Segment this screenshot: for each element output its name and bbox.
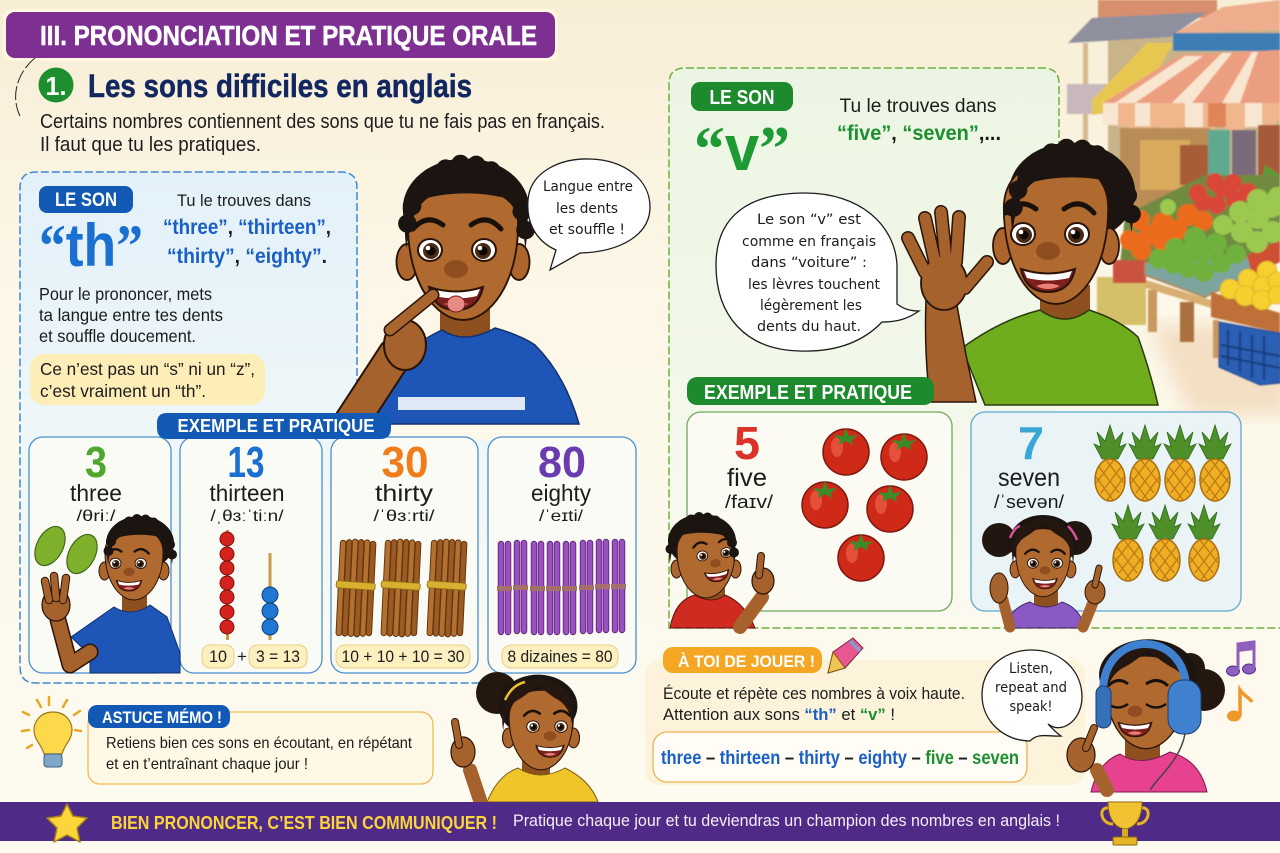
bottom banner	[0, 802, 1280, 841]
badge: le son	[691, 82, 793, 111]
introduction text: Certains nombres contiennent des sons que tu ne fais pas en français.	[40, 111, 605, 133]
panel: astuce memo	[88, 705, 433, 784]
card: seven: 7	[1018, 417, 1044, 469]
speech bubble: th	[528, 159, 650, 270]
panel: astuce memo: Retiens bien ces sons en écoutant, en répétant	[106, 735, 413, 752]
card: three: /θriː/	[76, 508, 116, 525]
speech bubble: listen: Listen,	[1009, 661, 1053, 677]
speech bubble: th: Langue entre	[543, 179, 633, 195]
card: seven: /ˈsevən/	[994, 492, 1064, 512]
card: seven: seven	[998, 464, 1060, 492]
card: thirteen: /ˌθɜːˈtiːn/	[210, 508, 284, 525]
badge: exemple et pratique blue	[157, 413, 391, 439]
card: five	[687, 412, 952, 611]
words containing th: “thirty”, “eighty”.	[167, 245, 327, 268]
boy showing three fingers	[42, 514, 180, 673]
panel: a toi de jouer: Attention aux sons “th” et “v” !	[663, 705, 895, 724]
yellow note: c’est vraiment un “th”.	[40, 381, 206, 401]
words containing v	[837, 96, 1001, 145]
card: three: 3	[85, 438, 107, 487]
sound label th: “th”	[39, 212, 143, 279]
panel: a toi de jouer: three – thirteen – thirty – eighty – five – seven	[661, 748, 1019, 769]
speech bubble: v: dans “voiture” :	[751, 255, 867, 271]
girl pointing up	[451, 672, 598, 802]
bottom banner: Pratique chaque jour et tu deviendras un champion des nombres en anglais !	[513, 811, 1060, 830]
five tomatoes	[802, 428, 927, 581]
introduction text	[40, 111, 605, 156]
yellow note	[30, 354, 265, 405]
words containing th	[163, 191, 331, 268]
panel: a toi de jouer: Écoute et répète ces nombres à voix haute.	[663, 684, 965, 703]
speech bubble: v: les lèvres touchent	[748, 277, 880, 293]
icon: orange music note	[1227, 690, 1252, 722]
section heading: Les sons difficiles en anglais	[88, 68, 472, 104]
bottom banner: BIEN PRONONCER, C’EST BIEN COMMUNIQUER !	[111, 813, 497, 833]
boy thumbs up	[666, 512, 774, 628]
card: thirty: thirty	[375, 480, 434, 506]
card: three: three	[70, 480, 122, 506]
speech bubble: listen: speak!	[1010, 699, 1052, 715]
badge: le son: LE SON	[710, 87, 774, 109]
badge: le son	[39, 186, 133, 213]
equation	[202, 645, 307, 668]
card: thirty: 30	[382, 438, 428, 487]
speech bubble: listen	[982, 650, 1082, 741]
card: five: 5	[734, 417, 760, 469]
speech bubble: th: les dents	[556, 201, 618, 217]
words containing th: Tu le trouves dans	[177, 191, 311, 210]
how to pronounce: ta langue entre tes dents	[39, 305, 223, 325]
cards row for th	[29, 437, 636, 673]
icon: trophy	[1102, 802, 1148, 845]
badge: exemple et pratique blue: EXEMPLE ET PRATIQUE	[178, 416, 374, 436]
words containing v: “five”, “seven”,...	[837, 122, 1001, 145]
icon: star	[47, 804, 87, 842]
title banner	[3, 9, 558, 61]
words containing th: “three”, “thirteen”,	[163, 216, 331, 239]
section heading: 1.	[46, 71, 66, 101]
icon: purple music note	[1226, 642, 1256, 676]
card: thirteen: thirteen	[210, 480, 284, 506]
boy explaining th	[350, 155, 579, 424]
yellow note: Ce n’est pas un “s” ni un “z”,	[40, 359, 255, 379]
bundles of sticks	[333, 541, 469, 635]
panel: a toi de jouer: À TOI DE JOUER !	[678, 652, 815, 671]
equation: +	[237, 647, 247, 666]
badge: exemple et pratique green: EXEMPLE ET PRATIQUE	[704, 382, 912, 404]
badge: le son: LE SON	[55, 190, 117, 211]
how to pronounce: et souffle doucement.	[39, 326, 196, 346]
words containing v: Tu le trouves dans	[840, 96, 996, 117]
card: thirty	[331, 437, 478, 673]
card: eighty: eighty	[531, 480, 591, 506]
speech bubble: v: Le son “v” est	[757, 212, 862, 228]
how to pronounce	[39, 284, 223, 346]
sound label v: “v”	[694, 112, 790, 184]
icon: two mangoes	[29, 521, 103, 579]
card: thirty: /ˈθɜːrti/	[374, 508, 435, 525]
card: seven	[971, 412, 1241, 611]
card: eighty	[488, 437, 636, 673]
panel: v sound	[669, 68, 1280, 628]
panel: astuce memo: et en t’entraînant chaque jour !	[106, 756, 308, 773]
boy waving	[908, 139, 1158, 405]
how to pronounce: Pour le prononcer, mets	[39, 284, 212, 304]
panel: th sound	[20, 172, 637, 683]
icon: pencil	[828, 638, 863, 673]
card: eighty: /ˈeɪti/	[539, 508, 584, 525]
card: three	[29, 437, 171, 673]
seven pineapples	[1094, 425, 1231, 581]
market background illustration	[1067, 0, 1280, 415]
card: five: /faɪv/	[725, 492, 773, 512]
speech bubble: v: comme en français	[742, 234, 876, 250]
equation: 10 + 10 + 10 = 30	[342, 647, 464, 666]
speech bubble: v: légèrement les	[760, 298, 862, 314]
girl with buns	[982, 515, 1105, 628]
equation: 8 dizaines = 80	[508, 647, 612, 666]
speech bubble: v	[716, 193, 919, 351]
equation: 3 = 13	[256, 647, 300, 666]
card: thirteen: 13	[228, 438, 264, 487]
introduction text: Il faut que tu les pratiques.	[40, 134, 261, 156]
girl with headphones	[1067, 639, 1225, 792]
speech bubble: th: et souffle !	[549, 222, 625, 238]
speech bubble: v: dents du haut.	[757, 319, 861, 335]
equation: 10	[209, 647, 227, 666]
curved dashed decoration	[16, 58, 35, 116]
purple sticks	[497, 542, 626, 632]
card: thirteen	[180, 437, 322, 673]
card: five: five	[727, 464, 767, 492]
card: eighty: 80	[538, 438, 586, 487]
speech bubble: listen: repeat and	[995, 680, 1067, 696]
icon: light bulb	[22, 697, 81, 767]
panel: a toi de jouer	[645, 647, 1085, 785]
abacus: ten red beads and three blue	[220, 530, 278, 640]
title banner: III. PRONONCIATION ET PRATIQUE ORALE	[40, 20, 537, 51]
panel: astuce memo: ASTUCE MÉMO !	[102, 708, 222, 727]
